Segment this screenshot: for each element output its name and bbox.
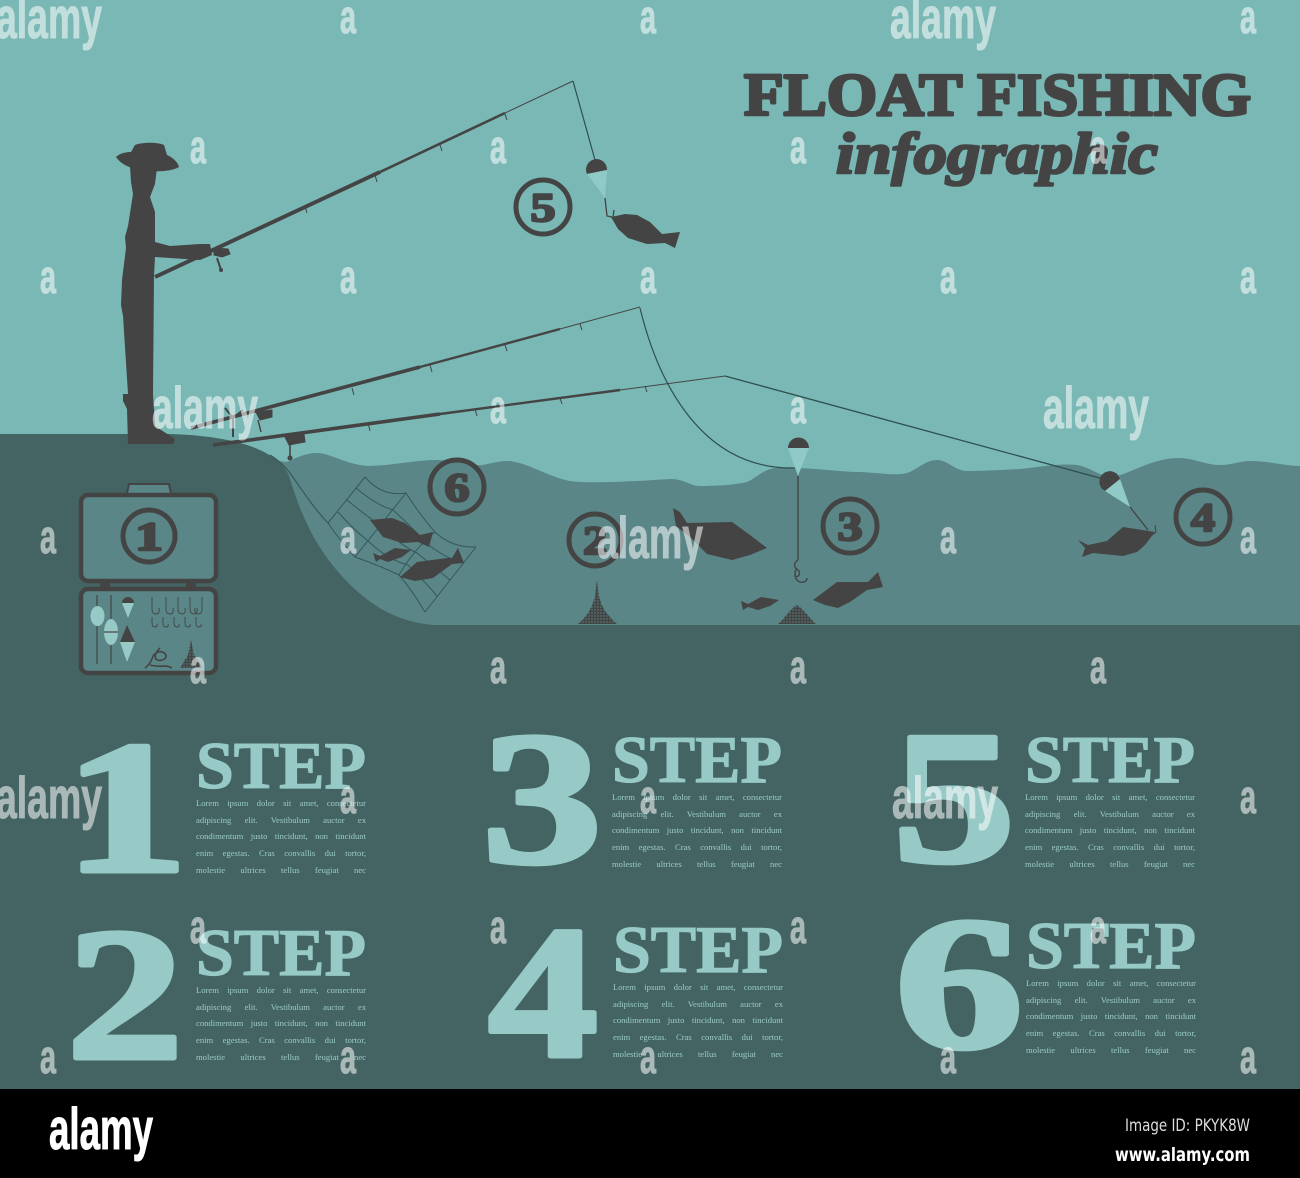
third rod line (725, 376, 1107, 480)
alamy watermarks: a (1090, 120, 1107, 173)
step 6: enim egestas. Cras convallis dui tortor, (1026, 1028, 1196, 1038)
step 3: condimentum justo tincidunt, non tincidunt (612, 825, 782, 835)
step 5: STEP (1025, 723, 1195, 797)
step 1: 1 (64, 703, 188, 912)
step 2: 2 (66, 890, 184, 1100)
rod held by angler (155, 81, 573, 277)
alamy watermarks: a (490, 380, 507, 433)
alamy watermarks: a (490, 640, 507, 693)
step 1: molestie ultrices tellus feugiat nec (196, 865, 366, 875)
fish on hook: step 4 (1078, 527, 1155, 557)
alamy watermarks: a (190, 120, 207, 173)
alamy watermarks: a (190, 640, 207, 693)
step 5 (893, 694, 1195, 902)
tray floats (90, 595, 135, 664)
step 1: enim egestas. Cras convallis dui tortor, (196, 848, 366, 858)
step 4: Lorem ipsum dolor sit amet, consectetur (613, 982, 783, 992)
step 1: STEP (196, 729, 366, 803)
alamy watermarks: a (40, 250, 57, 303)
step 3: molestie ultrices tellus feugiat nec (612, 859, 782, 869)
step 1: condimentum justo tincidunt, non tincidunt (196, 831, 366, 841)
alamy watermarks: a (340, 250, 357, 303)
step 2: Lorem ipsum dolor sit amet, consectetur (196, 985, 366, 995)
image id: Image ID: PKYK8W (1125, 1116, 1250, 1136)
bait pile: step 2 (578, 580, 617, 624)
alamy watermarks: a (790, 120, 807, 173)
step 4: condimentum justo tincidunt, non tincidunt (613, 1015, 783, 1025)
step 1 (64, 703, 366, 912)
footer logo: alamy (49, 1097, 153, 1162)
step 3 marker: 3 (837, 505, 863, 549)
step 4 marker (1176, 490, 1230, 544)
alamy watermarks: a (640, 1030, 657, 1083)
water (270, 453, 1300, 640)
tray hooks (152, 597, 202, 627)
step 6: molestie ultrices tellus feugiat nec (1026, 1045, 1196, 1055)
alamy watermarks: a (1090, 900, 1107, 953)
step 4: enim egestas. Cras convallis dui tortor, (613, 1032, 783, 1042)
alamy watermarks: a (40, 510, 57, 563)
box handle (127, 484, 171, 493)
step 2: molestie ultrices tellus feugiat nec (196, 1052, 366, 1062)
alamy watermarks: a (1240, 250, 1257, 303)
tray bait pile (180, 640, 203, 668)
step 3: adipiscing elit. Vestibulum auctor ex (612, 809, 782, 819)
step 6 marker: 6 (444, 466, 470, 510)
alamy watermarks: alamy (892, 766, 998, 831)
alamy watermarks: a (640, 250, 657, 303)
alamy watermarks: alamy (0, 766, 102, 831)
step 1 marker (123, 510, 175, 562)
step 3: STEP (612, 723, 782, 797)
step 6 marker (430, 460, 484, 514)
float and hook: step 3 (788, 438, 809, 582)
step 2 (66, 890, 366, 1100)
step 5: molestie ultrices tellus feugiat nec (1025, 859, 1195, 869)
step 1: adipiscing elit. Vestibulum auctor ex (196, 815, 366, 825)
step 5 marker (516, 180, 570, 234)
tackle box: 1 (135, 515, 163, 559)
fish beside bait (813, 572, 883, 608)
step 6 (895, 879, 1196, 1088)
box tray (81, 589, 216, 673)
alamy watermarks: a (1090, 640, 1107, 693)
step 6: condimentum justo tincidunt, non tincidunt (1026, 1011, 1196, 1021)
step 6: STEP (1026, 909, 1196, 983)
bait pile: step 3 (778, 605, 816, 624)
second rod with stand (191, 307, 640, 437)
step 4 (488, 889, 783, 1098)
step 4 marker: 4 (1191, 496, 1215, 540)
alamy watermarks: a (1240, 770, 1257, 823)
sky background (0, 0, 1300, 640)
step 1: Lorem ipsum dolor sit amet, consectetur (196, 798, 366, 808)
alamy watermarks: a (790, 380, 807, 433)
step 3: enim egestas. Cras convallis dui tortor, (612, 842, 782, 852)
step 2 marker (569, 514, 621, 566)
step 5: enim egestas. Cras convallis dui tortor, (1025, 842, 1195, 852)
step 3: 3 (482, 694, 602, 903)
angler silhouette (116, 143, 212, 444)
tackle box (81, 484, 216, 673)
alamy watermarks: a (1240, 510, 1257, 563)
alamy watermarks: a (340, 510, 357, 563)
title (744, 62, 1251, 186)
float: step 4 (1099, 471, 1156, 535)
tray worm bait (145, 648, 172, 668)
step 5: condimentum justo tincidunt, non tincidunt (1025, 825, 1195, 835)
website: www.alamy.com (1115, 1144, 1250, 1166)
step 3 marker (823, 499, 877, 553)
alamy watermarks: a (940, 1030, 957, 1083)
alamy watermarks: a (340, 1030, 357, 1083)
alamy watermarks: alamy (597, 506, 703, 571)
step 5: Lorem ipsum dolor sit amet, consectetur (1025, 792, 1195, 802)
step 2: STEP (196, 916, 366, 990)
step 5 marker: 5 (530, 186, 556, 230)
footer band (0, 1089, 1300, 1178)
alamy watermarks: a (790, 900, 807, 953)
alamy watermarks: a (190, 900, 207, 953)
small fish (741, 597, 779, 610)
step 3 (482, 694, 782, 903)
step 6: adipiscing elit. Vestibulum auctor ex (1026, 995, 1196, 1005)
step 2: enim egestas. Cras convallis dui tortor, (196, 1035, 366, 1045)
step 6: 6 (895, 879, 1023, 1088)
alamy watermarks: a (640, 770, 657, 823)
subtitle: infographic (836, 121, 1158, 186)
alamy watermarks: a (790, 640, 807, 693)
step 3: Lorem ipsum dolor sit amet, consectetur (612, 792, 782, 802)
step 5: 5 (893, 694, 1015, 902)
alamy watermarks: alamy (1043, 376, 1149, 441)
step 5: adipiscing elit. Vestibulum auctor ex (1025, 809, 1195, 819)
step 2: condimentum justo tincidunt, non tincidunt (196, 1018, 366, 1028)
hinges (100, 582, 196, 588)
third rod with reel (213, 376, 725, 460)
step 6: Lorem ipsum dolor sit amet, consectetur (1026, 978, 1196, 988)
title: FLOAT FISHING (744, 62, 1251, 128)
step 4: molestie ultrices tellus feugiat nec (613, 1049, 783, 1059)
box lid (81, 495, 216, 581)
alamy watermarks: a (940, 250, 957, 303)
second rod line (640, 308, 795, 468)
alamy watermarks: a (490, 900, 507, 953)
body (121, 166, 212, 444)
alamy watermarks: a (940, 510, 957, 563)
line and float: step 5 (573, 81, 614, 217)
step 4: adipiscing elit. Vestibulum auctor ex (613, 999, 783, 1009)
fish in net (370, 518, 464, 581)
step 2: adipiscing elit. Vestibulum auctor ex (196, 1002, 366, 1012)
large fish (673, 508, 767, 560)
alamy watermarks: a (340, 770, 357, 823)
fish on hook: step 5 (611, 214, 680, 248)
keep net (270, 455, 476, 612)
hat (116, 143, 179, 171)
alamy watermarks: a (490, 120, 507, 173)
alamy watermarks: a (40, 1030, 57, 1083)
step 4: 4 (488, 889, 598, 1098)
ground and shore (0, 434, 1300, 1090)
alamy watermarks: alamy (152, 376, 258, 441)
step 2 marker: 2 (583, 519, 607, 563)
step 4: STEP (613, 913, 783, 987)
alamy watermarks: a (1240, 1030, 1257, 1083)
